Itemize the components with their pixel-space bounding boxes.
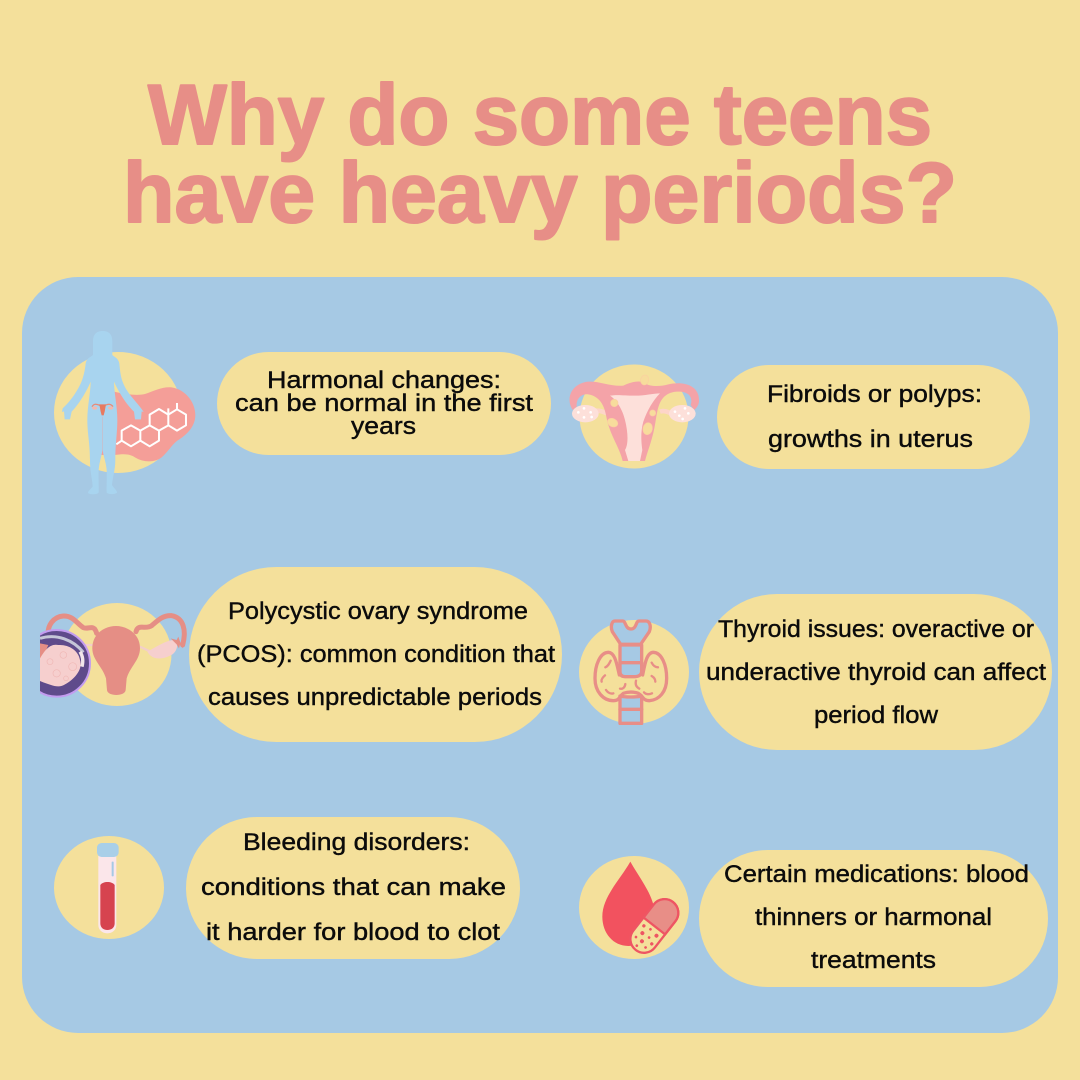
pill: hormonal changes text: years [351, 413, 416, 440]
pill: medications text: treatments [811, 947, 936, 974]
pill: thyroid text: period flow [814, 702, 939, 729]
pill: bleeding disorders text [186, 817, 520, 959]
pill: PCOS text: Polycystic ovary syndrome [228, 598, 528, 625]
pill: thyroid text: underactive thyroid can affect [706, 659, 1046, 686]
pill: PCOS text: (PCOS): common condition that [197, 641, 555, 668]
item: thyroid [579, 594, 1052, 750]
pill: hormonal changes text: can be normal in the first [235, 390, 533, 417]
item: fibroids [570, 364, 1030, 469]
title [123, 68, 957, 241]
pill: thyroid text: Thyroid issues: overactive or [718, 616, 1034, 643]
pill: fibroids text [717, 365, 1030, 469]
item: PCOS [23, 567, 562, 742]
pill: bleeding disorders text: it harder for blood to clot [206, 919, 500, 946]
pill: medications text: Certain medications: blood [724, 861, 1029, 888]
item: bleeding disorders [54, 817, 520, 959]
pill: fibroids text: Fibroids or polyps: [767, 381, 982, 408]
title: have heavy periods? [123, 146, 957, 241]
icon: blood test tube [54, 836, 164, 939]
item: medications [579, 850, 1048, 987]
pill: PCOS text: causes unpredictable periods [208, 684, 542, 711]
pill: medications text: thinners or harmonal [755, 904, 992, 931]
icon: uterus with fibroids [570, 364, 699, 468]
icon: body with hormone molecule [54, 331, 195, 494]
icon: thyroid gland [579, 620, 689, 724]
pill: hormonal changes text: Harmonal changes: [267, 367, 501, 394]
pill: medications text [699, 850, 1048, 987]
pill: bleeding disorders text: Bleeding disorders: [243, 829, 470, 856]
item: hormonal changes [54, 331, 551, 494]
icon: uterus with ovary magnifier [23, 603, 184, 706]
pill: hormonal changes text [217, 352, 551, 455]
icon: blood drop and capsule [579, 856, 689, 959]
pill: PCOS text [189, 567, 562, 742]
pill: thyroid text [699, 594, 1052, 750]
title: Why do some teens [148, 68, 932, 163]
pill: bleeding disorders text: conditions that can make [201, 874, 506, 901]
pill: fibroids text: growths in uterus [768, 426, 973, 453]
panel: blue background [22, 277, 1058, 1033]
